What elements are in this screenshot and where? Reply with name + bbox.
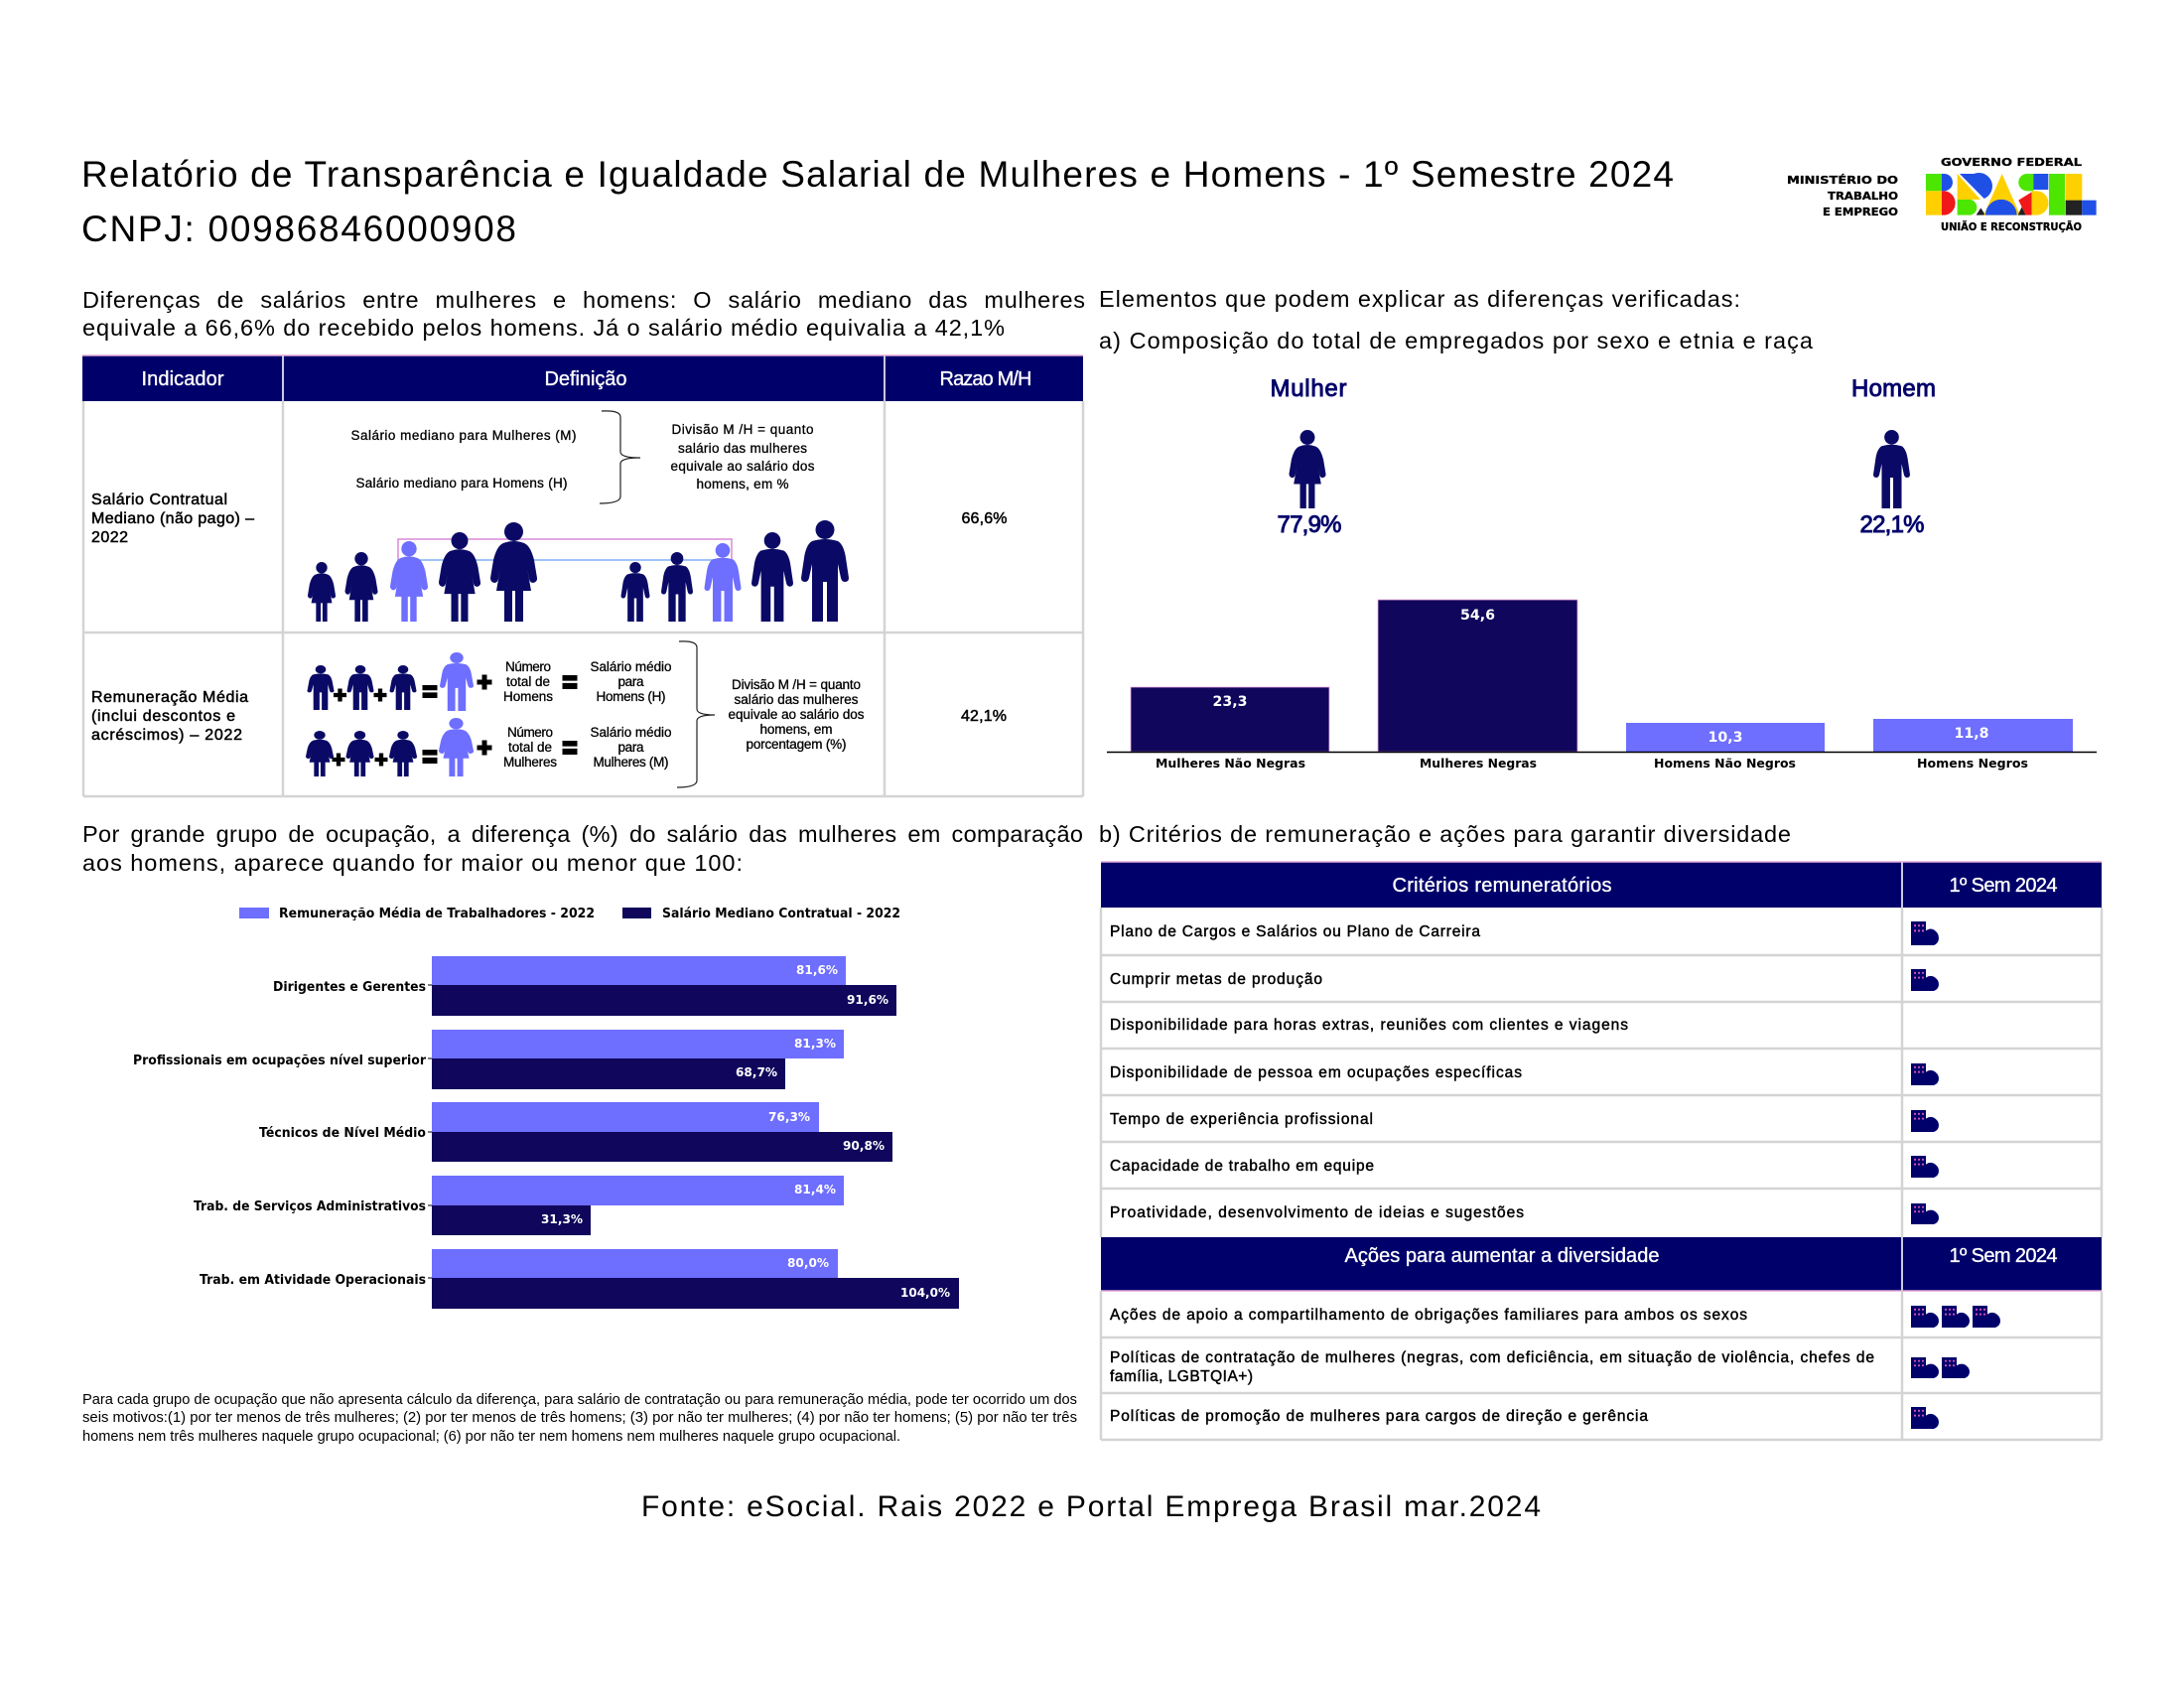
row label: salário contratual mediano: Salário Contratual [91,492,227,508]
row: experiência [1110,1110,1939,1132]
definition: median division text: Divisão M /H = quanto [671,422,814,437]
legend: Salário Mediano Contratual - 2022 [662,907,900,921]
row label: salário contratual mediano: Mediano (não pago) – [91,510,254,527]
header: critérios: Critérios remuneratórios [1392,875,1612,897]
row: políticas de contratação: Políticas de contratação de mulheres (negras, com deficiência, em situação de violência, chefes de [1110,1349,1874,1366]
bars: técnicos [259,1102,892,1162]
bars: profissionais [133,1030,844,1089]
bars: técnicos: 76,3% [768,1110,810,1124]
logo: Governo Federal Brasil: GOVERNO FEDERAL [1941,157,2082,169]
pictogram: woman share: 77,9% [1277,511,1342,538]
formula: average pay for women [306,718,671,776]
formula: average pay for men: total de [506,674,550,689]
row: experiência: Tempo de experiência profissional [1110,1111,1373,1128]
bars: dirigentes e gerentes: 81,6% [796,963,838,977]
row: obrigações familiares: Ações de apoio a compartilhamento de obrigações familiares para ambos os sexos [1110,1307,1747,1324]
title: Relatório de Transparência e Igualdade Salarial de Mulheres e Homens - 1º Semestre 2024 [81,154,1674,195]
bars: atividade operacionais: 104,0% [900,1286,950,1300]
row: ocupações específicas [1110,1063,1939,1085]
text block: occupation group intro [82,821,1083,876]
text block: salary difference intro: Diferenças de salários entre mulheres e homens: O salário mediano das mulheres [82,287,1085,313]
chart: composition bars: Mulheres Não Negras [1156,756,1305,771]
chart: composition bars: Homens Não Negros [1654,756,1796,771]
chart: composition bars: Mulheres Negras [1420,756,1537,771]
formula: average pay for men: Salário médio [590,659,671,674]
brace: median division [600,411,640,503]
header: ações: Ações para aumentar a diversidade [1344,1245,1660,1267]
formula: average pay for women: Mulheres [503,755,557,770]
formula: average pay for women: Mulheres (M) [594,755,669,770]
row: políticas de contratação: família, LGBTQIA+) [1110,1368,1253,1385]
panel: indicator table [82,355,1083,796]
definition: average division text: Divisão M /H = quanto [732,677,861,692]
value: 42,1%: 42,1% [961,708,1007,725]
value: 66,6%: 66,6% [961,510,1007,527]
bars: atividade operacionais [200,1249,959,1309]
chart: composition bars: 11,8 [1954,726,1989,742]
table header: Indicador [141,368,224,390]
definition: median labels: Salário mediano para Mulheres (M) [351,428,576,443]
row: políticas de contratação [1110,1349,1970,1385]
chart: composition bars: 23,3 [1213,694,1247,710]
formula: average pay for men: Homens [503,689,553,704]
row: políticas de promoção: Políticas de promoção de mulheres para cargos de direção e gerência [1110,1408,1648,1425]
table header [82,355,1083,401]
formula: average pay for men: para [617,674,644,689]
definition: average division text [729,677,865,752]
source line: Fonte: eSocial. Rais 2022 e Portal Emprega Brasil mar.2024 [641,1490,1541,1523]
pictogram: woman share [1271,375,1346,538]
bars: profissionais: 68,7% [736,1065,777,1079]
formula: average pay for men: Número [505,659,551,674]
title [81,154,1674,249]
pictogram: woman share: Mulher [1271,375,1346,402]
bars: serviços administrativos [194,1176,844,1235]
title: CNPJ: 00986846000908 [81,209,516,249]
row: plano de cargos [1110,921,1939,945]
formula: average pay for women: total de [508,740,552,755]
text block: criteria heading: b) Critérios de remuneração e ações para garantir diversidade [1099,821,1791,847]
definition: median labels: Salário mediano para Homens (H) [355,476,568,491]
bars: atividade operacionais: Trab. em Atividade Operacionais [200,1273,426,1288]
bars: serviços administrativos: 81,4% [794,1183,836,1196]
footnote: Para cada grupo de ocupação que não apresenta cálculo da diferença, para salário de contratação ou para remuneração média, pode ter ocorrido um dos [82,1392,1077,1408]
bars: serviços administrativos: Trab. de Serviços Administrativos [194,1199,426,1214]
logo: Ministério do Trabalho e Emprego: MINISTÉRIO DO [1787,174,1898,187]
row label: remuneração média: acréscimos) – 2022 [91,727,242,744]
row: horas extras: Disponibilidade para horas extras, reuniões com clientes e viagens [1110,1017,1628,1034]
legend [239,907,900,921]
bars: profissionais: 81,3% [794,1037,836,1051]
bars: técnicos: Técnicos de Nível Médio [259,1126,426,1141]
logo: Ministério do Trabalho e Emprego: TRABALHO [1828,191,1898,203]
chart: occupation bars [133,907,959,1309]
text block: explaining elements heading: Elementos que podem explicar as diferenças verificadas: [1099,286,1740,312]
footnote: homens nem três mulheres naquele grupo ocupacional; (6) por não ter nem homens nem mulheres naquele grupo ocupacional. [82,1429,900,1445]
bars: profissionais: Profissionais em ocupações nível superior [133,1054,427,1068]
definition: median labels [351,428,576,491]
definition: average division text: homens, em [760,722,832,737]
icons: men row by height [621,520,849,622]
row: plano de cargos: Plano de Cargos e Salários ou Plano de Carreira [1110,923,1480,940]
row: metas [1110,969,1939,991]
header: ações [1101,1237,2102,1291]
icons: women row by height [308,522,537,622]
row: proatividade: Proatividade, desenvolvimento de ideias e sugestões [1110,1204,1524,1221]
formula: average pay for women: Número [507,725,553,740]
bars: técnicos: 90,8% [843,1139,885,1153]
definition: average division text: porcentagem (%) [747,737,846,752]
text block: occupation group intro: aos homens, aparece quando for maior ou menor que 100: [82,850,743,876]
row: obrigações familiares [1110,1306,2000,1328]
text block: occupation group intro: Por grande grupo de ocupação, a diferença (%) do salário das mulheres em comparação [82,821,1083,847]
row: políticas de promoção [1110,1407,1939,1429]
logo: Ministério do Trabalho e Emprego: E EMPREGO [1823,207,1898,218]
formula: average pay for women: Salário médio [590,725,671,740]
pictogram: man share: 22,1% [1860,511,1924,538]
chart: composition bars: Homens Negros [1917,756,2028,771]
footnote: seis motivos:(1) por ter menos de três mulheres; (2) por ter menos de três homens; (3) por não ter mulheres; (4) por não ter homens; (5) por não ter três [82,1410,1077,1426]
panel: criteria table [1101,862,2102,1440]
formula: average pay for men [308,652,671,711]
formula: average pay for men: Homens (H) [596,689,665,704]
logo: Governo Federal Brasil: UNIÃO E RECONSTRUÇÃO [1941,220,2082,233]
row: metas: Cumprir metas de produção [1110,971,1322,988]
median highlight box [398,539,732,560]
definition: median division text [671,422,815,492]
bars: dirigentes e gerentes [273,956,896,1016]
row label: salário contratual mediano [91,492,254,546]
definition: average division text: salário das mulheres [735,692,859,707]
text block: explaining elements heading [1099,286,1814,353]
row: proatividade [1110,1203,1939,1224]
bars: dirigentes e gerentes: 91,6% [847,993,888,1007]
logo: Ministério do Trabalho e Emprego [1787,174,1898,218]
row: trabalho em equipe: Capacidade de trabalho em equipe [1110,1158,1374,1175]
bars: serviços administrativos: 31,3% [541,1212,583,1226]
definition: average division text: equivale ao salário dos [729,707,865,722]
header: ações: 1º Sem 2024 [1950,1245,2057,1267]
table header: Razao M/H [939,368,1032,390]
pictogram: man share [1851,375,1936,538]
definition: median division text: equivale ao salário dos [671,459,815,474]
chart: composition bars: 54,6 [1460,608,1495,624]
row label: remuneração média: (inclui descontos e [91,708,235,725]
bars: atividade operacionais: 80,0% [787,1256,829,1270]
bars: dirigentes e gerentes: Dirigentes e Gerentes [273,980,426,995]
table header: Definição [544,368,627,390]
row: ocupações específicas: Disponibilidade de pessoa em ocupações específicas [1110,1064,1522,1081]
text block: salary difference intro: equivale a 66,6% do recebido pelos homens. Já o salário médio equivalia a 42,1% [82,315,1005,341]
row label: salário contratual mediano: 2022 [91,529,128,546]
header: critérios: 1º Sem 2024 [1950,875,2057,897]
logo: Governo Federal Brasil [1926,157,2097,233]
text block: salary difference intro [82,287,1085,341]
definition: median division text: homens, em % [697,477,788,492]
formula: average pay for women: para [617,740,644,755]
pictogram: man share: Homem [1851,375,1936,402]
definition: median division text: salário das mulheres [678,441,807,456]
header: critérios [1101,862,2102,908]
legend: Remuneração Média de Trabalhadores - 2022 [279,907,595,921]
chart: composition bars: 10,3 [1707,730,1743,746]
text block: explaining elements heading: a) Composição do total de empregados por sexo e etnia e raça [1099,328,1814,353]
row: trabalho em equipe [1110,1156,1939,1178]
brace: average division [677,641,715,787]
row label: remuneração média [91,689,248,744]
footnote [82,1392,1077,1445]
row label: remuneração média: Remuneração Média [91,689,248,706]
chart: composition bars [1107,600,2097,771]
